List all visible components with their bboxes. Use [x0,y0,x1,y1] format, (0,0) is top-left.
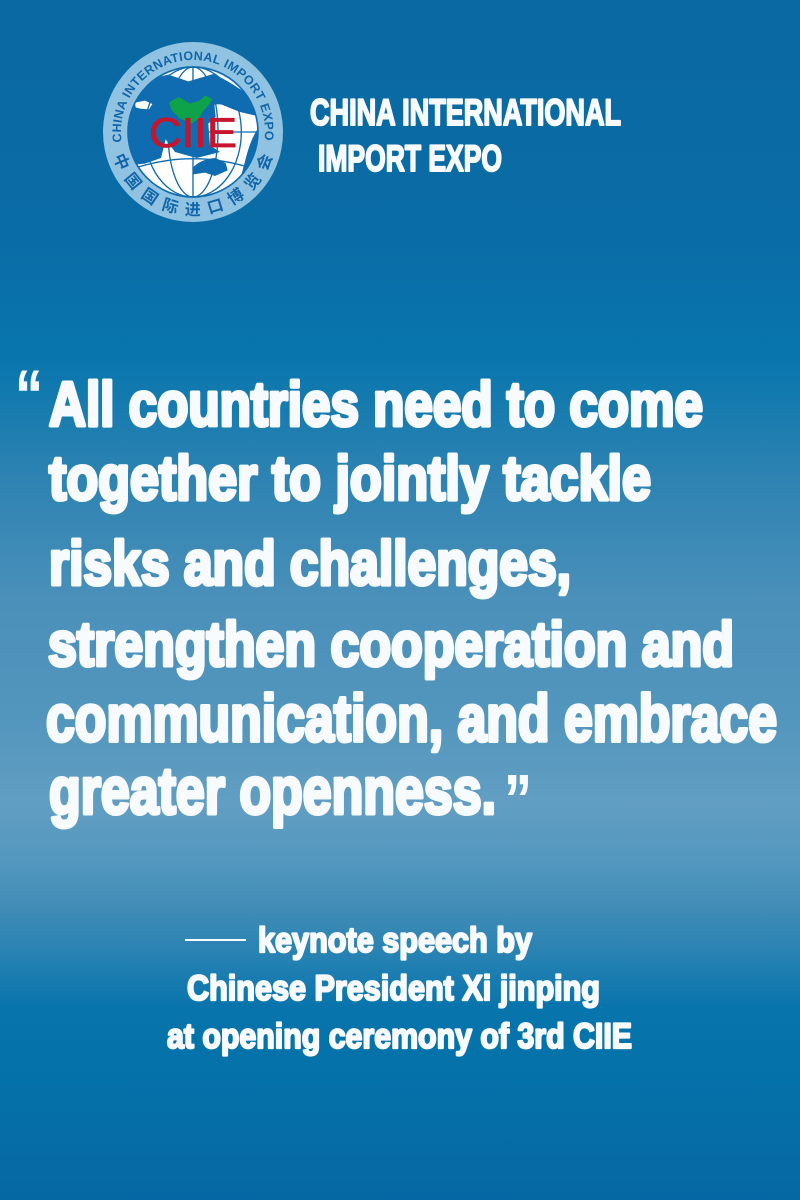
globe grid [128,67,258,197]
quote text: together to jointly tackle [49,444,651,514]
quote text [46,370,777,828]
attribution text: keynote speech by [258,921,532,960]
quote text: risks and challenges, [49,530,571,598]
header title: IMPORT EXPO [318,138,502,179]
quote text: greater openness. [49,754,496,828]
ring text: English: CHINA INTERNATIONAL IMPORT EXPO [112,51,274,142]
closing quotation mark: ” [504,760,532,838]
CIIE letters: CIIE [149,109,237,156]
icon: CIIE globe logo [103,42,283,222]
opening quotation mark: “ [15,356,43,434]
ring text: Chinese: 中国国际进口博览会 [114,154,273,216]
attribution text: at opening ceremony of 3rd CIIE [167,1017,632,1056]
attribution text: Chinese President Xi jinping [187,969,600,1008]
header title [310,92,621,179]
China shape [169,95,212,124]
attribution dash [185,939,246,941]
globe map [125,66,262,198]
header title: CHINA INTERNATIONAL [310,92,621,133]
attribution text [167,921,632,1056]
